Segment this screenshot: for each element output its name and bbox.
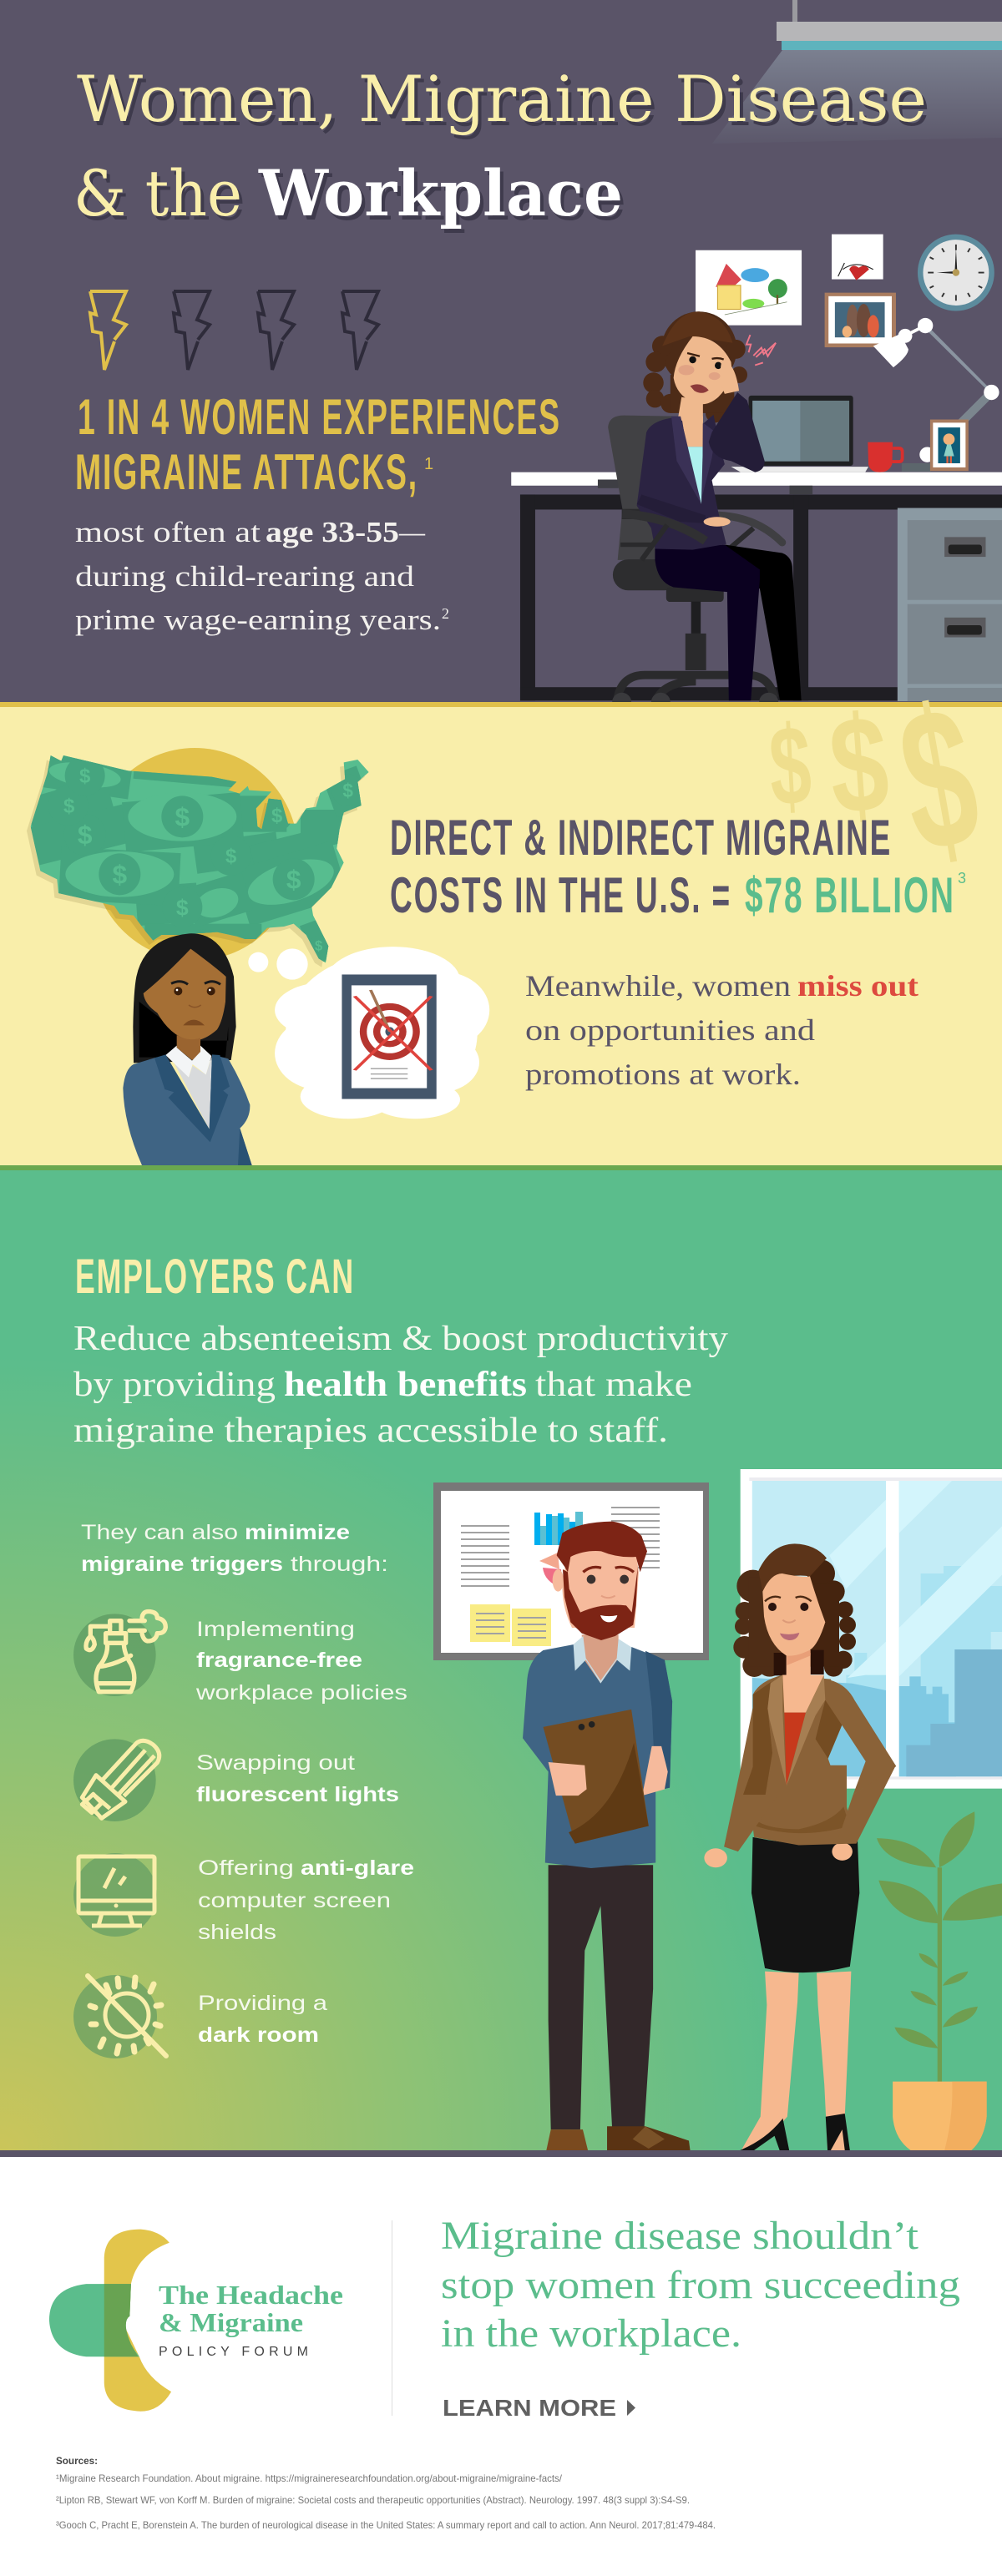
logo: POLICY FORUM (159, 2345, 308, 2359)
text: fragrance-free: Implementing (196, 1618, 355, 1641)
text: women miss out: miss out (797, 969, 918, 1003)
filing cabinet (898, 508, 1002, 701)
illustration: potted plant (877, 1811, 1002, 2150)
text: anti-glare: anti-glare (301, 1856, 414, 1880)
icon: fragrance spray bottle (73, 1612, 165, 1696)
text: reduce absenteeism: migraine therapies accessible to staff. (73, 1412, 668, 1450)
statistic heading: MIGRAINE ATTACKS, (75, 444, 418, 500)
title: Women, Migraine Disease (77, 62, 927, 136)
text: women miss out: on opportunities and (525, 1013, 815, 1047)
text: reduce absenteeism (73, 1320, 728, 1450)
illustration: worried woman in blue blazer (123, 933, 252, 1165)
text: reduce absenteeism: Reduce absenteeism & boost productivity (73, 1320, 728, 1358)
icon row: 1 of 4 lightning bolts highlighted (90, 291, 378, 370)
statistic heading: 1 (424, 455, 433, 473)
sources: ³Gooch C, Pracht E, Borenstein A. The burden of neurological disease in the United States: A summary report and call to action. Ann Neurol. 2017;81:479-484. (56, 2519, 716, 2531)
age text block: 2 (442, 605, 449, 622)
illustration: map of US made of money: $ (175, 801, 190, 831)
text: dark room: dark room (198, 2023, 319, 2047)
text: fragrance-free (195, 1618, 407, 1705)
text: dark room: Providing a (198, 1992, 327, 2015)
sources (56, 2455, 716, 2531)
logo: & Migraine (159, 2307, 303, 2337)
text: minimize triggers: They can also (81, 1521, 238, 1544)
panel: employers can (0, 1170, 1002, 2157)
illustration: map of US made of money: $ (79, 765, 90, 788)
title (73, 62, 927, 230)
age text block (75, 516, 449, 636)
statistic heading: 1 IN 4 WOMEN EXPERIENCES (78, 389, 561, 445)
text: women miss out: promotions at work. (525, 1058, 801, 1091)
text: reduce absenteeism: that make (535, 1366, 692, 1404)
closing message: in the workplace. (441, 2311, 741, 2356)
illustration: bearded man with clipboard (523, 1522, 691, 2150)
sources: ²Lipton RB, Stewart WF, von Korff M. Burden of migraine: Societal costs and therapeutic opportunities (Abstract). Neurology. 1997. 48(3 suppl 3):S4-S9. (56, 2494, 690, 2506)
illustration: office scene (511, 235, 1002, 712)
text: fluorescent lights: fluorescent lights (196, 1783, 399, 1806)
ceiling light (712, 0, 1002, 144)
family photo (825, 293, 896, 347)
text: reduce absenteeism: by providing (73, 1366, 276, 1404)
text: anti-glare: shields (198, 1921, 276, 1944)
illustration: map of US made of money: $ (63, 795, 74, 817)
red mug (868, 442, 903, 472)
child's drawing (696, 250, 802, 326)
dollar signs watermark: $ (825, 686, 893, 843)
illustration: map of US made of money (27, 748, 369, 980)
costs heading: COSTS IN THE U.S. = (390, 867, 731, 923)
note: lower left (58, 847, 181, 906)
chair (608, 416, 782, 712)
illustration: map of US made of money: $ (315, 937, 323, 953)
closing message: stop women from succeeding (441, 2263, 960, 2307)
title: Workplace (258, 156, 623, 230)
panel: footer (0, 2157, 1002, 2576)
age text block: prime wage-earning years. (75, 604, 441, 636)
note: center (122, 792, 253, 927)
text: minimize triggers: through: (291, 1553, 388, 1576)
desk (511, 472, 1002, 700)
banknotes (24, 750, 371, 965)
text: minimize triggers: minimize (245, 1521, 350, 1544)
learn more call to action: LEARN MORE (443, 2395, 616, 2421)
icon: crossed-out sun (73, 1975, 166, 2058)
illustration: woman with curly hair in brown jacket (704, 1543, 896, 2150)
text: minimize triggers (81, 1521, 388, 1576)
text: fragrance-free: workplace policies (195, 1681, 407, 1705)
illustration: map of US made of money: $ (342, 780, 353, 801)
illustration: map of US made of money: $ (286, 864, 301, 894)
heading: EMPLOYERS CAN (75, 1250, 355, 1304)
panel: migraine costs (0, 664, 1002, 1170)
purple divider (0, 2150, 1002, 2157)
illustration: map of US made of money: $ (78, 820, 93, 850)
text: minimize triggers: migraine triggers (81, 1553, 283, 1576)
text: women miss out (525, 969, 918, 1091)
icon: computer monitor (73, 1853, 157, 1937)
costs heading: 3 (958, 870, 966, 886)
costs heading (390, 810, 966, 923)
text: fragrance-free: fragrance-free (196, 1649, 362, 1672)
text: anti-glare: computer screen (198, 1889, 391, 1912)
text: anti-glare (198, 1856, 414, 1944)
text: fluorescent lights (196, 1751, 399, 1806)
small photo of child (930, 420, 969, 471)
panel: header, woman with migraine at her desk (0, 0, 1002, 712)
icon: fluorescent bulb (73, 1739, 159, 1821)
dollar signs watermark: $ (885, 664, 992, 896)
thought bubble with crossed-out target (275, 947, 489, 1119)
illustration: map of US made of money: $ (113, 859, 128, 889)
sources: Sources: (56, 2455, 98, 2467)
age text block: during child-rearing and (75, 560, 415, 593)
closing message (441, 2214, 960, 2356)
green divider (0, 1165, 1002, 1170)
illustration: map of US made of money: $ (225, 845, 236, 867)
wall clock (918, 235, 994, 311)
text: reduce absenteeism: health benefits (284, 1366, 527, 1404)
age text block: most often at (75, 516, 261, 548)
pain sparks (746, 335, 776, 365)
illustration: whiteboard with charts (433, 1482, 709, 1660)
text: fluorescent lights: Swapping out (196, 1751, 355, 1775)
age text block: age 33-55 (266, 516, 399, 548)
age text block: — (398, 516, 426, 548)
text: anti-glare: Offering (198, 1856, 294, 1880)
note with heart (832, 235, 883, 280)
text: women miss out: Meanwhile, women (525, 969, 791, 1003)
dollar signs watermark: $ (767, 702, 814, 830)
title: & the (73, 156, 242, 230)
illustration: map of US made of money: $ (271, 805, 282, 827)
laptop (731, 396, 868, 472)
sources: ¹Migraine Research Foundation. About migraine. https://migraineresearchfoundation.org/about-migraine/migraine-facts/ (56, 2472, 563, 2484)
logo (49, 2230, 343, 2412)
illustration: window with skyline (735, 1461, 1002, 1795)
closing message: Migraine disease shouldn’t (441, 2214, 919, 2258)
statistic heading (75, 389, 561, 500)
yellow divider (0, 702, 1002, 707)
desk lamp (873, 318, 999, 472)
seated woman holding her head (622, 311, 802, 700)
illustration: map of US made of money: $ (176, 896, 189, 921)
logo: The Headache (159, 2280, 343, 2310)
dollar signs watermark (767, 664, 992, 896)
text: dark room (198, 1992, 327, 2047)
thought dots (248, 952, 268, 972)
